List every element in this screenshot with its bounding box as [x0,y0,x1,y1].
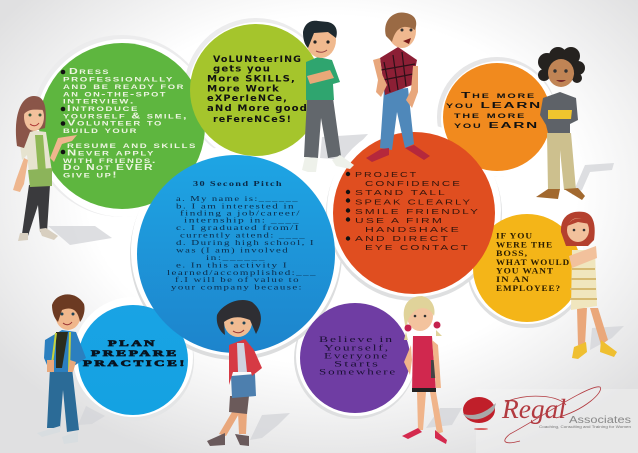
presentation tips text: AND DIRECT [355,234,450,243]
tips text: with friends. [63,156,157,165]
presentation tips text: EYE CONTACT [365,243,470,252]
believe text [319,335,397,376]
boss question text: IF YOU [496,232,533,240]
presentation tips text: HANDSHAKE [365,225,461,234]
boss question text: BOSS, [496,249,528,258]
learn earn text: you LEARN [446,100,542,110]
tips text [61,67,197,180]
learn earn text: you EARN [454,120,539,130]
boss question text [496,232,570,293]
pitch text: d. During high school, I [176,238,315,247]
pitch text: currently attend: ____ [180,230,306,240]
character: boy in plaid shirt [366,12,430,162]
panel: volunteering [190,24,322,156]
presentation tips text: PROJECT [355,170,418,179]
tips text: Dress [69,67,110,76]
pitch text: b. I am interested in [176,201,295,210]
believe text: Believe in [319,335,394,344]
pitch text: e. In this activity I [176,260,288,270]
logo wordmark: Regal [501,394,566,424]
learn earn text: The more [461,90,536,100]
character: boy with green shirt [302,21,354,172]
character: boy with curly hair [536,47,585,200]
character: boy in blue jacket [37,294,86,444]
tips text: give up! [63,170,118,180]
pitch text: was (I am) involved [176,246,289,254]
character: girl with black hair and red jacket [207,300,262,446]
panel: light blue plan [78,305,188,415]
believe text: Yourself, [324,343,390,352]
pitch text: in:______ [206,253,266,262]
tips text: build your [63,126,138,135]
believe text: Starts [334,359,380,368]
tips text: Volunteer to [67,119,163,128]
volunteering text: reFereNCeS! [213,115,292,125]
volunteering text [207,55,308,125]
floor shadows [48,134,624,440]
pitch text: learned/accomplished:___ [167,268,317,277]
logo associates: Associates [569,415,631,426]
presentation tips text: SPEAK CLEARLY [355,198,472,206]
panel: green tips [39,43,205,209]
believe text: Everyone [324,351,389,360]
presentation tips text: STAND TALL [355,188,447,197]
logo mark [463,397,496,430]
tips text: Do Not EVER [63,163,154,172]
pitch text: internship in: ____ [184,216,300,225]
learn earn text [446,90,542,130]
volunteering text: eXPerIeNCe, [207,94,288,104]
panel: purple believe [300,303,410,413]
boss question text: WHAT WOULD [496,258,570,267]
panel: halos behind circles [31,18,587,421]
logo tagline: Coaching, Consulting and Training for Women [539,425,631,429]
volunteering text: aNd More good [207,104,308,114]
pitch text: a. My name is:______ [176,194,299,203]
panel: red presentation tips [333,132,495,294]
tips text: interview. [63,97,135,106]
character: girl in striped dress [561,212,617,359]
boss question text: EMPLOYEE? [496,284,561,293]
pitch text: c. I graduated from/I [176,223,300,232]
logo script [505,387,601,443]
volunteering text: VoLUNteerING [213,55,302,65]
tips text: Never apply [67,148,155,158]
volunteering text: More SKILLS, [207,74,296,84]
panel: orange learn earn [443,63,551,171]
boss question text: WERE THE [496,240,553,250]
tips text: Introduce [67,104,139,113]
pitch text: 30 Second Pitch [193,179,283,188]
volunteering text: More Work [207,84,280,94]
believe text: Somewhere [319,367,397,376]
presentation tips text: SMILE FRIENDLY [355,207,480,216]
character: girl with green top [13,96,77,241]
pitch text: your company because: [171,282,303,292]
presentation tips text [346,170,480,252]
tips text: professionally [63,74,174,84]
boss question text: YOU WANT [496,266,554,275]
plan prepare practice text [83,338,187,368]
pitch text: f.I will be of value to [175,275,300,284]
logo: Regal and Associates [463,387,638,453]
pitch text: finding a job/career/ [180,208,301,218]
presentation tips text: USE A FIRM [355,216,444,225]
panel: yellow boss question [473,214,581,322]
tips text: resume and skills [67,141,197,150]
panel: blue 30 second pitch [137,155,335,353]
tips text: and be ready for [63,82,185,91]
boss question text: IN AN [496,275,530,284]
plan prepare practice text: PREPARE [91,348,179,358]
presentation tips text: CONFIDENCE [365,179,462,188]
character: blonde girl with pink dress [402,296,447,444]
tips text: an on-the-spot [63,89,167,98]
tips text: yourself & smile, [63,111,188,120]
plan prepare practice text: PRACTICE! [83,358,187,368]
pitch text [167,179,317,292]
plan prepare practice text: PLAN [108,338,157,348]
volunteering text: gets you [213,64,271,74]
learn earn text: the more [454,110,526,120]
